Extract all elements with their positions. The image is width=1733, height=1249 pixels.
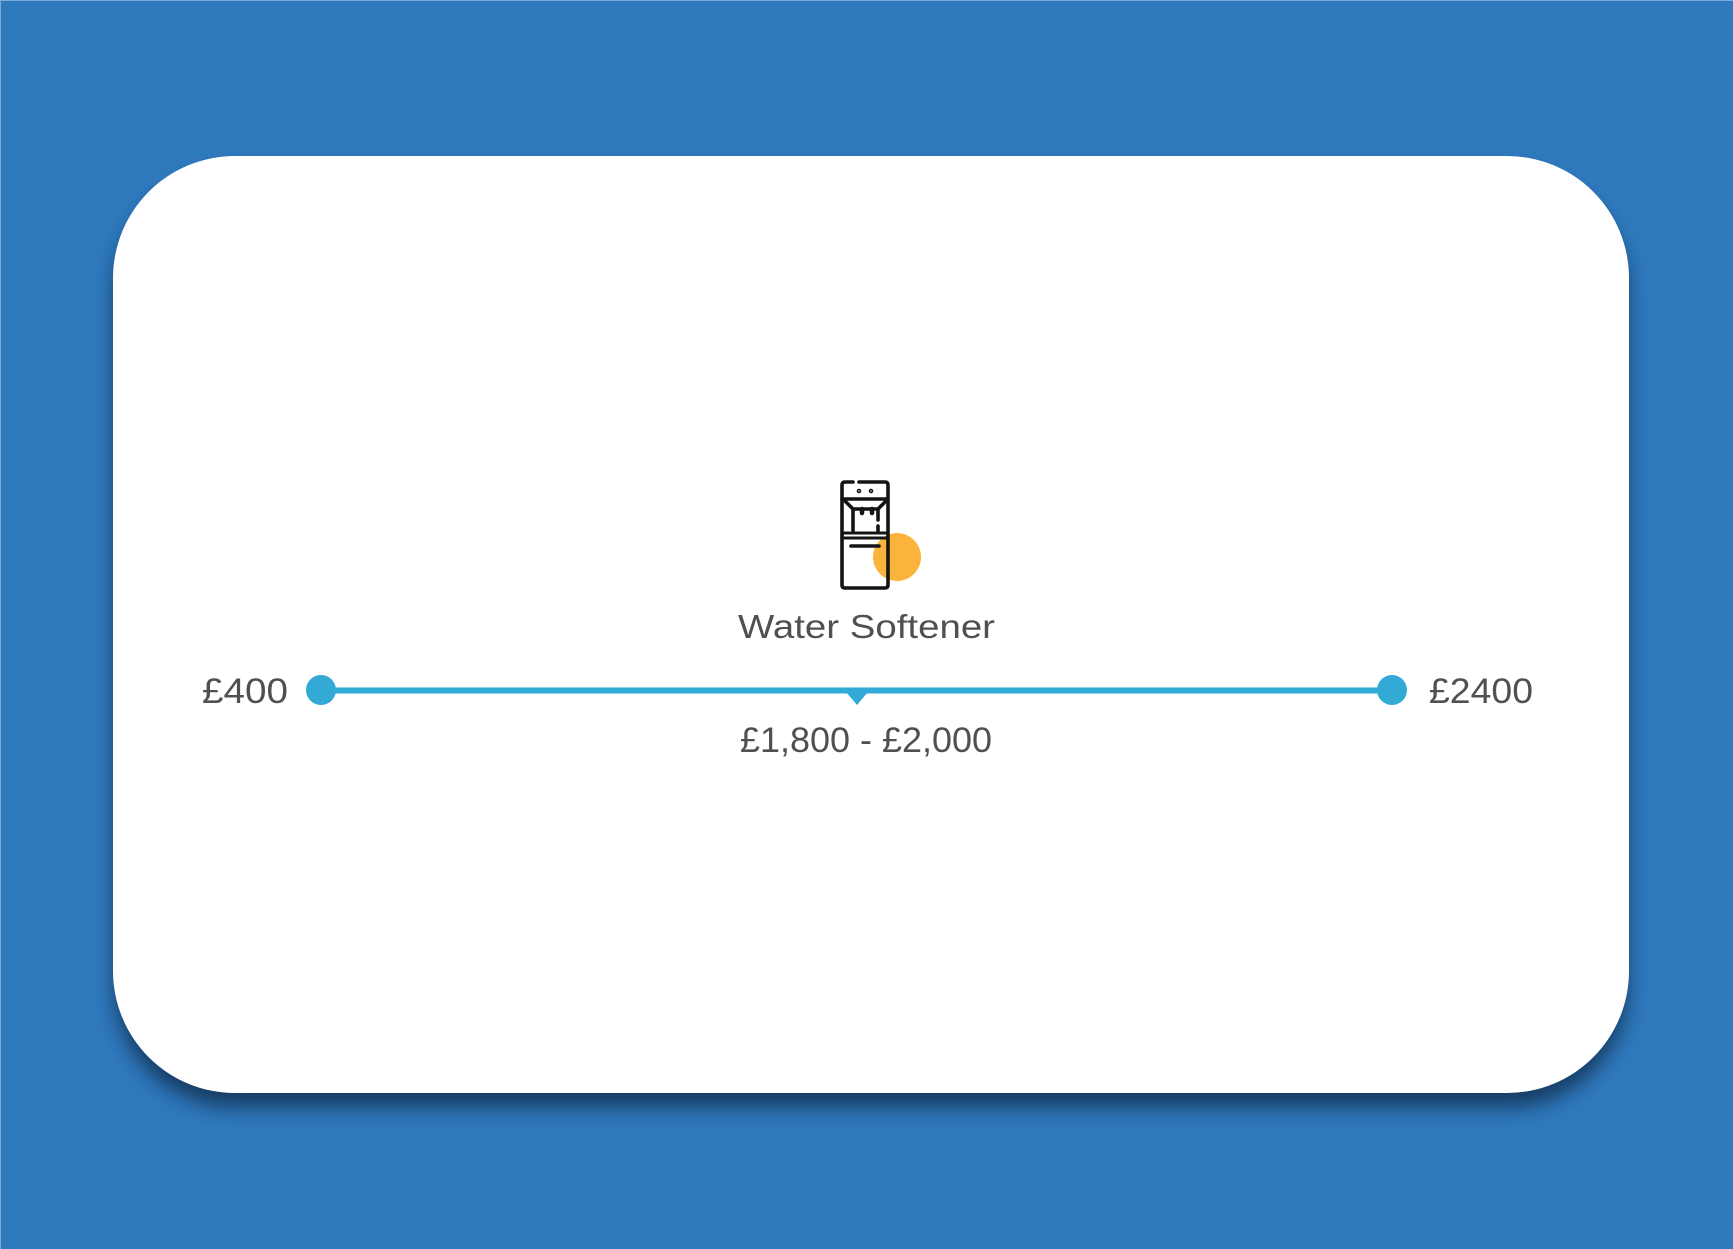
range line	[321, 687, 1392, 694]
marker: maximum dot	[1377, 675, 1407, 705]
heading: Water Softener: Water Softener	[738, 608, 995, 645]
panel: white card	[113, 156, 1629, 1093]
icon: orange accent circle	[873, 533, 921, 581]
label: minimum price: £400	[202, 672, 288, 711]
label: maximum price: £2400	[1429, 672, 1533, 711]
icon: water softener unit	[842, 482, 888, 588]
label: typical price range: £1,800 - £2,000	[740, 721, 992, 760]
marker: typical cost pointer	[846, 692, 868, 705]
marker: minimum dot	[306, 675, 336, 705]
